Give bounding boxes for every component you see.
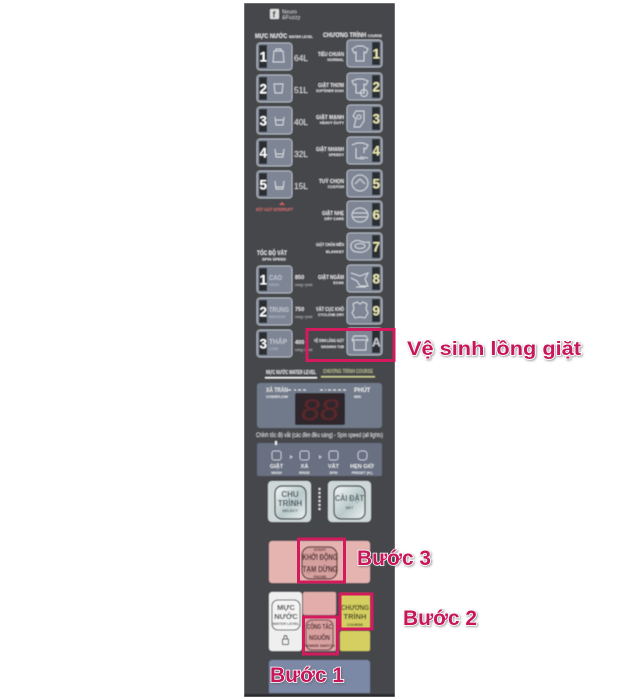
course 4 speedy: 4 bbox=[372, 144, 380, 158]
power switch key: POWER SWITCH bbox=[304, 644, 335, 648]
water level button 3: 40L bbox=[294, 117, 308, 127]
spin button: low: LOW bbox=[269, 346, 278, 351]
water level button 5 bbox=[257, 171, 308, 198]
water level button 3: 3 bbox=[260, 114, 268, 128]
course 4 speedy: GIẶT NHANH bbox=[316, 146, 344, 153]
course yellow key: TRÌNH bbox=[344, 612, 366, 621]
highlight: course bbox=[340, 594, 372, 629]
set button: SET bbox=[346, 505, 354, 510]
power switch key: NGUỒN bbox=[309, 632, 330, 642]
indicator panel: PRESET (H.) bbox=[352, 471, 372, 475]
brand logo bbox=[270, 9, 301, 21]
water level button 4 bbox=[257, 139, 308, 166]
water level button 4: 32L bbox=[294, 149, 308, 159]
water level button 1 bbox=[257, 43, 308, 70]
callout: step 1: Bước 1 bbox=[270, 664, 344, 687]
heading: water level: MỰC NƯỚC WATER LEVEL bbox=[255, 31, 313, 40]
power switch key: CÔNG TẮC bbox=[307, 622, 332, 631]
course 2 softener: SOFTENER SOAK bbox=[316, 89, 344, 93]
water level button 2: 51L bbox=[294, 85, 308, 95]
power switch key bbox=[303, 616, 336, 651]
display panel: XẢ TRÀN bbox=[266, 387, 288, 394]
course 9 cyclone dry: 9 bbox=[372, 304, 380, 318]
course 8 soak: GIẶT NGÂM bbox=[318, 274, 344, 281]
course 2 softener bbox=[316, 73, 382, 100]
LED display: 88 bbox=[301, 394, 339, 427]
pink blank key bbox=[303, 592, 336, 615]
separator dots bbox=[318, 488, 320, 510]
display panel: PHÚT bbox=[354, 387, 371, 394]
callout: washing tub cleaning: Vệ sinh lồng giặt bbox=[407, 339, 582, 360]
course 5 custom bbox=[319, 170, 382, 197]
blue bottom key bbox=[269, 660, 370, 693]
course 8 soak: SOAK bbox=[333, 281, 344, 285]
course yellow key: CHƯƠNG bbox=[341, 603, 369, 612]
water level button 1: 64L bbox=[294, 53, 308, 63]
spin button: high: CAO bbox=[269, 273, 282, 282]
set button: CÀI ĐẶT bbox=[335, 494, 364, 503]
course 5 custom: CUSTOM bbox=[328, 185, 344, 189]
tab: water level: MỰC NƯỚC WATER LEVEL bbox=[266, 368, 316, 376]
heading: course: CHƯƠNG TRÌNH COURSE bbox=[323, 30, 382, 39]
select button: CHU bbox=[281, 490, 299, 499]
course 3 heavy duty bbox=[316, 105, 382, 132]
water level key: NƯỚC bbox=[274, 612, 298, 621]
spin button: low bbox=[257, 330, 312, 357]
select button: SELECT bbox=[282, 508, 298, 513]
spin speed instruction: Chỉnh tốc độ vắt (các đèn đều sáng) - Spin speed (all lights) bbox=[256, 432, 383, 439]
course 3 heavy duty: HEAVY DUTY bbox=[320, 121, 344, 125]
indicator panel: HẸN GIỜ bbox=[350, 462, 374, 470]
course 1 normal bbox=[318, 40, 382, 67]
spin button: medium: MEDIUM bbox=[269, 314, 285, 319]
course 6 dry care: DRY CARE bbox=[324, 217, 344, 221]
set button bbox=[328, 481, 371, 522]
course 1 normal: 1 bbox=[372, 46, 380, 62]
course 1 normal: NORMAL bbox=[327, 58, 345, 62]
water level button 3 bbox=[257, 107, 308, 134]
spin button: low: 3 bbox=[260, 336, 268, 352]
spin button: high: 850 bbox=[295, 275, 304, 281]
course 7 blanket: BLANKET bbox=[326, 250, 345, 254]
brand logo: Neuro bbox=[282, 10, 297, 16]
spin button: high: 1 bbox=[260, 272, 268, 288]
indicator panel: VẮT bbox=[328, 462, 340, 470]
water level button 2: 2 bbox=[260, 82, 267, 96]
water level button 5: 15L bbox=[294, 181, 308, 191]
start pause strip: PAUSE bbox=[314, 575, 327, 579]
course 7 blanket: 7 bbox=[372, 240, 380, 254]
course 8 soak bbox=[318, 265, 382, 292]
spin button: low: THẤP bbox=[269, 336, 287, 346]
indicator panel: XẢ bbox=[301, 463, 308, 470]
start pause strip bbox=[269, 541, 370, 583]
highlight: power switch bbox=[304, 617, 338, 654]
course 7 blanket bbox=[316, 233, 382, 260]
course 4 speedy: SPEEDY bbox=[329, 153, 344, 157]
select button: TRÌNH bbox=[278, 499, 302, 508]
spin button: medium bbox=[257, 298, 312, 325]
course 5 custom: 5 bbox=[372, 176, 380, 192]
heading: spin speed: SPIN SPEED bbox=[262, 256, 286, 262]
indicator panel bbox=[257, 441, 382, 476]
course 6 dry care: GIẶT NHẸ bbox=[322, 210, 345, 217]
course 4 speedy bbox=[316, 137, 382, 164]
indicator panel: WASH bbox=[271, 471, 282, 475]
display panel bbox=[257, 383, 382, 428]
course 8 soak: 8 bbox=[372, 272, 380, 286]
indicator panel: RINSE bbox=[299, 471, 311, 475]
course A washing tub: VỆ SINH LỒNG GIẶT bbox=[314, 336, 344, 343]
water level button 4: 4 bbox=[260, 146, 268, 160]
spin button: low: vòng / phút bbox=[295, 348, 312, 352]
start pause strip: KHỞI ĐỘNG bbox=[302, 553, 338, 562]
course yellow key: COURSE bbox=[347, 623, 364, 627]
water level key: WATER LEVEL bbox=[273, 622, 300, 626]
course 2 softener: 2 bbox=[372, 80, 380, 94]
spin button: high: vòng / phút bbox=[295, 283, 312, 287]
water level button 5: 5 bbox=[260, 178, 268, 192]
heading: spin speed bbox=[257, 247, 287, 262]
water level key: MỰC bbox=[277, 603, 296, 612]
course 3 heavy duty: GIẶT MẠNH bbox=[316, 114, 344, 121]
callout: step 2: Bước 2 bbox=[403, 607, 477, 630]
yellow blank key bbox=[340, 631, 370, 651]
indicator panel: SPIN bbox=[329, 471, 338, 475]
course 5 custom: TUỲ CHỌN bbox=[319, 178, 344, 185]
course 1 normal: TIÊU CHUẨN bbox=[318, 50, 344, 58]
course A washing tub: WASHING TUB bbox=[321, 345, 344, 349]
course A washing tub bbox=[314, 328, 382, 355]
course 2 softener: GIẶT THƠM bbox=[318, 82, 344, 89]
display panel: MIN bbox=[354, 395, 361, 399]
select button bbox=[268, 481, 311, 522]
course A washing tub: A bbox=[372, 336, 381, 350]
display panel: OVERFLOW bbox=[266, 395, 288, 399]
interrupt label: ĐỘT GIẶT INTERRUPT bbox=[256, 205, 293, 212]
course yellow key bbox=[340, 593, 370, 629]
tab: water level bbox=[265, 368, 317, 378]
course 9 cyclone dry bbox=[316, 297, 382, 324]
course 6 dry care: 6 bbox=[372, 208, 380, 222]
course 9 cyclone dry: CYCLONE DRY bbox=[318, 313, 344, 317]
course 9 cyclone dry: VẮT CỤC KHÔ bbox=[316, 305, 344, 313]
water level button 1: 1 bbox=[260, 50, 268, 64]
tab: course bbox=[321, 367, 375, 378]
spin button: low: 400 bbox=[295, 340, 304, 346]
panel: washing machine control panel bbox=[244, 3, 395, 697]
highlight: start pause bbox=[298, 539, 344, 582]
course 6 dry care bbox=[322, 201, 382, 228]
spin button: medium: TRUNG bbox=[269, 307, 289, 314]
course 7 blanket: GIẶT CHĂN MỀN bbox=[316, 241, 344, 247]
water level button 2 bbox=[257, 75, 308, 102]
callout: step 3: Bước 3 bbox=[357, 547, 431, 570]
interrupt label bbox=[256, 202, 293, 212]
spin button: medium: 750 bbox=[295, 307, 304, 313]
indicator panel: GIẶT bbox=[270, 463, 284, 470]
start pause strip: START bbox=[314, 548, 327, 552]
course 3 heavy duty: 3 bbox=[372, 112, 380, 126]
brand logo: f bbox=[272, 10, 276, 20]
tab: course: CHƯƠNG TRÌNH COURSE bbox=[323, 367, 374, 375]
spin button: high bbox=[257, 266, 312, 293]
water level key bbox=[269, 592, 302, 651]
brand logo: &Fuzzy bbox=[282, 15, 301, 21]
heading: spin speed: TỐC ĐỘ VẮT bbox=[257, 247, 287, 257]
highlight: washing tub bbox=[307, 330, 394, 360]
spin button: medium: 2 bbox=[260, 304, 267, 320]
spin button: medium: vòng / phút bbox=[295, 315, 312, 319]
spin button: high: HIGH bbox=[269, 282, 279, 287]
start pause strip: TẠM DỪNG bbox=[302, 565, 338, 574]
